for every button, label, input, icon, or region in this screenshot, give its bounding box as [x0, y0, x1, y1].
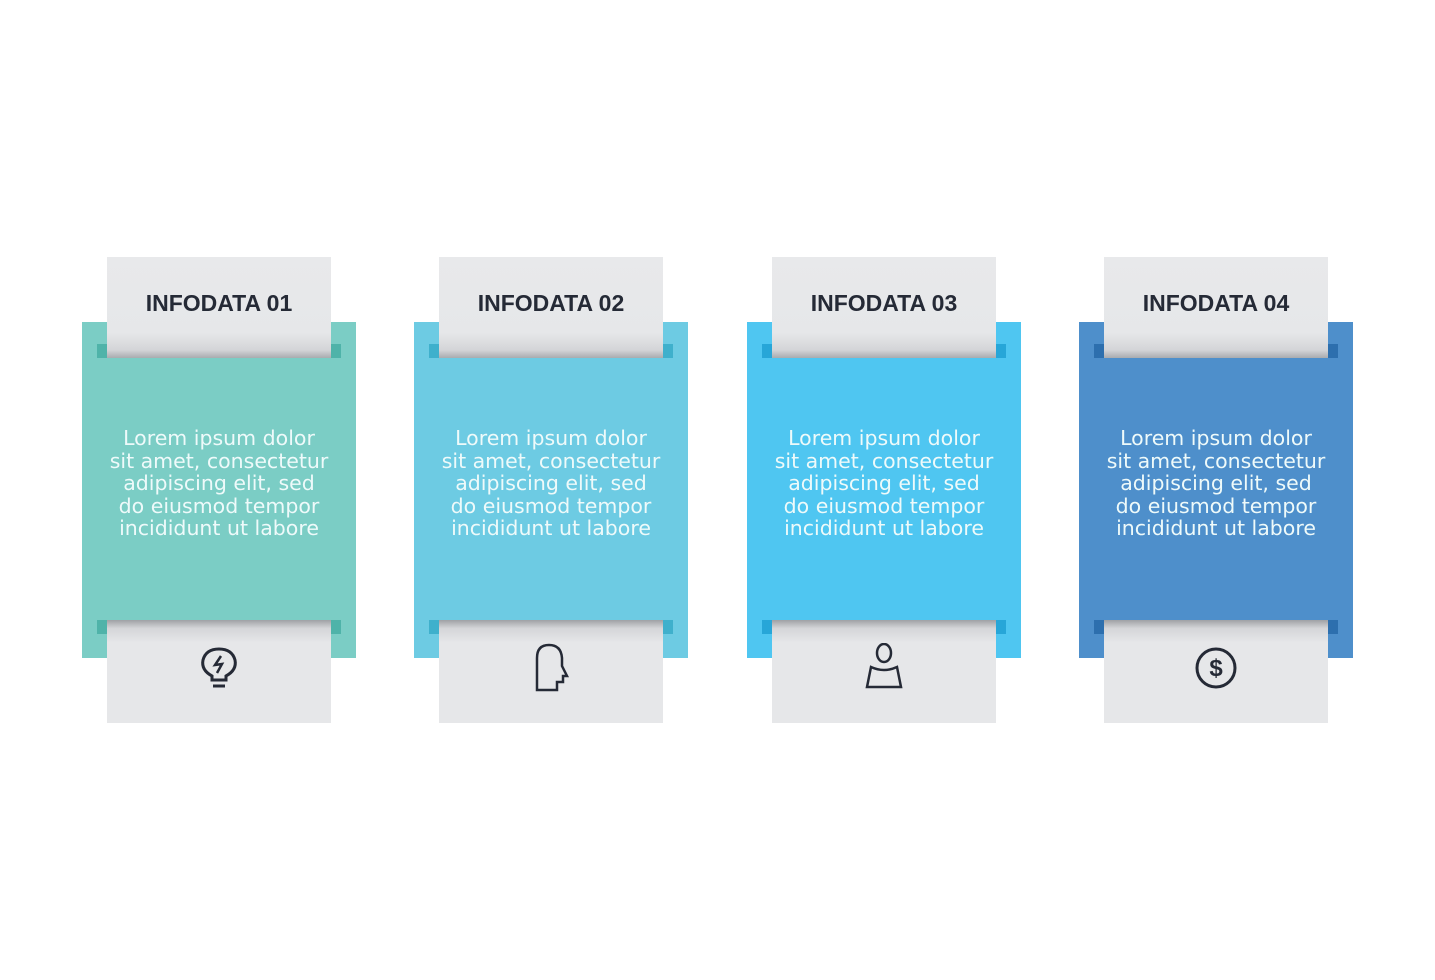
- body text: adipiscing elit, sed: [1120, 471, 1312, 495]
- header tab: INFODATA 01: [146, 290, 292, 316]
- body text: sit amet, consectetur: [110, 449, 328, 473]
- body text: [1107, 426, 1326, 540]
- header tab: [107, 257, 331, 358]
- footer tab with icon: bulb: [107, 620, 331, 723]
- body text: do eiusmod tempor: [1116, 494, 1316, 518]
- card 1: [82, 257, 356, 723]
- body text: incididunt ut labore: [784, 516, 984, 540]
- body text: sit amet, consectetur: [775, 449, 993, 473]
- body text: incididunt ut labore: [1116, 516, 1316, 540]
- body text: Lorem ipsum dolor: [788, 426, 980, 450]
- color panel: [1079, 322, 1353, 658]
- body text: adipiscing elit, sed: [788, 471, 980, 495]
- body text: Lorem ipsum dolor: [455, 426, 647, 450]
- body text: [442, 426, 660, 540]
- header tab: INFODATA 02: [478, 290, 624, 316]
- card 2: [414, 257, 688, 723]
- body text: do eiusmod tempor: [119, 494, 319, 518]
- body text: Lorem ipsum dolor: [123, 426, 315, 450]
- card 4: [1079, 257, 1353, 723]
- footer tab with icon: person: [772, 620, 996, 723]
- body text: do eiusmod tempor: [784, 494, 984, 518]
- footer tab with icon: dollar: $: [1209, 655, 1223, 682]
- body text: sit amet, consectetur: [442, 449, 660, 473]
- header tab: [1104, 257, 1328, 358]
- body text: adipiscing elit, sed: [123, 471, 315, 495]
- header tab: INFODATA 03: [811, 290, 957, 316]
- color panel: [82, 322, 356, 658]
- header tab: [439, 257, 663, 358]
- body text: incididunt ut labore: [119, 516, 319, 540]
- body text: sit amet, consectetur: [1107, 449, 1325, 473]
- card 3: [747, 257, 1021, 723]
- body text: adipiscing elit, sed: [455, 471, 647, 495]
- body text: [775, 426, 994, 540]
- color panel: [747, 322, 1021, 658]
- body text: incididunt ut labore: [451, 516, 651, 540]
- header tab: INFODATA 04: [1143, 290, 1289, 316]
- color panel: [414, 322, 688, 658]
- body text: [110, 426, 328, 540]
- body text: Lorem ipsum dolor: [1120, 426, 1312, 450]
- header tab: [772, 257, 996, 358]
- footer tab with icon: head: [439, 620, 663, 723]
- footer tab with icon: dollar: [1104, 620, 1328, 723]
- body text: do eiusmod tempor: [451, 494, 651, 518]
